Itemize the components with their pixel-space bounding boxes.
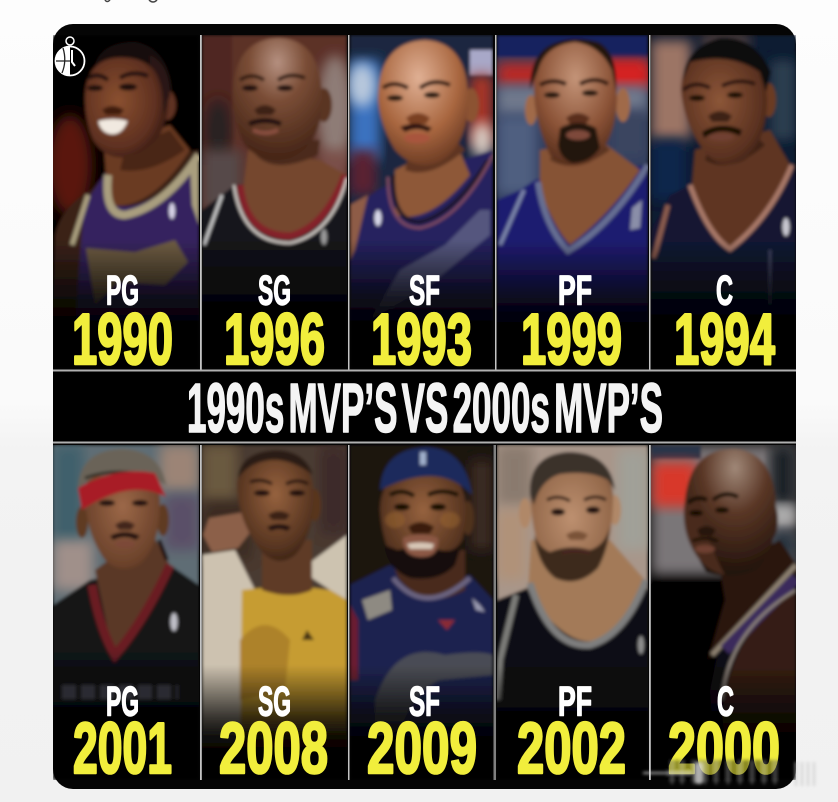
portrait: power forward in blue jersey — [497, 35, 648, 312]
position label: SF — [409, 678, 440, 724]
watermark overlay — [643, 760, 814, 786]
position label: PG — [106, 678, 139, 724]
title band — [53, 369, 796, 447]
position label: SF — [409, 266, 440, 314]
portrait: power forward in black jersey — [497, 445, 648, 703]
panel: 2001 PG — [53, 445, 199, 789]
panel: 1993 SF — [348, 35, 493, 380]
year: 1993 — [371, 300, 472, 380]
panel: 2009 SF — [350, 445, 493, 789]
portrait: point guard with red headband — [53, 445, 199, 780]
position label: C — [717, 678, 734, 724]
panel: 1999 PF — [497, 35, 648, 380]
panel: 1994 C — [651, 35, 796, 380]
panel: 2002 PF — [497, 445, 648, 789]
year: 1990 — [72, 300, 173, 380]
portrait: shooting guard in black jersey — [202, 35, 347, 266]
year: 2002 — [517, 709, 626, 789]
portrait: small forward in purple jersey — [350, 35, 493, 313]
year: 2009 — [367, 709, 477, 789]
position label: C — [716, 266, 733, 314]
portrait: small forward with navy headband — [350, 445, 493, 724]
position label: SG — [258, 266, 291, 314]
year: 1994 — [674, 300, 775, 380]
position label: PF — [558, 678, 592, 724]
logo: stopwatch basketball — [56, 37, 84, 76]
panel: 1996 SG — [202, 35, 353, 380]
panel: 1990 PG — [48, 35, 199, 380]
year: 1996 — [224, 300, 325, 380]
column dividers: top row — [200, 35, 650, 370]
position label: PG — [106, 266, 139, 314]
year: 2001 — [73, 709, 172, 789]
panel: 2008 SG — [202, 445, 347, 789]
portrait: center in navy jersey — [651, 35, 796, 304]
year: 2008 — [219, 709, 328, 789]
year: 2000 — [668, 709, 780, 789]
panel: 2000 C — [651, 445, 800, 789]
portrait: shooting guard in yellow jersey — [202, 445, 347, 736]
year: 1999 — [521, 300, 622, 380]
portrait: point guard in purple jersey — [53, 35, 199, 308]
position label: SG — [258, 678, 291, 724]
portrait: center with purple strap — [651, 445, 800, 780]
position label: PF — [558, 266, 592, 314]
column dividers: bottom row — [200, 445, 651, 780]
